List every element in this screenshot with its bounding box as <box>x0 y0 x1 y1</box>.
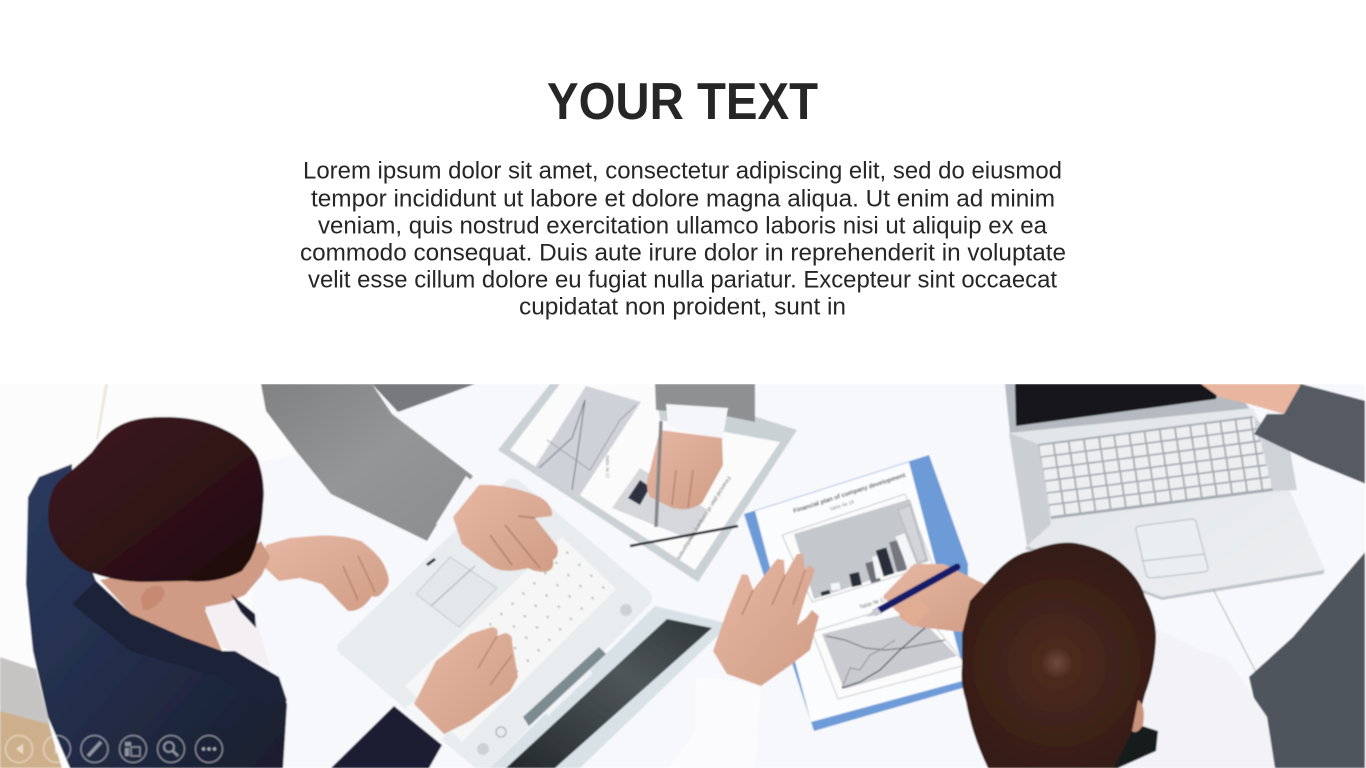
folder <box>744 455 968 731</box>
chart title text: Financial plan of company development <box>792 472 906 515</box>
body text block: veniam, quis nostrud exercitation ullamco laboris nisi ut aliquip ex ea <box>318 212 1048 240</box>
seated woman <box>26 417 518 768</box>
shoulder <box>372 384 475 412</box>
blue folder with charts: Table № 16 <box>829 499 855 513</box>
hinge <box>523 647 606 726</box>
touchpad <box>1136 519 1208 578</box>
document tray, top: Table № 17 <box>605 455 610 479</box>
body text block: Lorem ipsum dolor sit amet, consectetur adipiscing elit, sed do eiusmod <box>303 158 1062 184</box>
hand resting on folder <box>713 554 819 686</box>
white laptop, woman <box>337 478 730 768</box>
pen button <box>81 736 108 762</box>
title: YOUR TEXT <box>547 73 818 131</box>
document tray, top: Financial plan of company development <box>675 475 731 561</box>
line chart <box>812 600 966 699</box>
paper <box>755 462 966 722</box>
cuff <box>405 702 446 742</box>
seated man, bottom right <box>962 543 1275 768</box>
desk surface <box>0 384 1365 768</box>
cuff <box>436 476 479 534</box>
base <box>337 478 652 768</box>
next button <box>44 736 70 762</box>
pen <box>656 421 661 527</box>
touchpad <box>416 557 497 627</box>
lapel <box>72 581 287 704</box>
slideshow controls <box>6 736 222 762</box>
man's white cuff and sleeve, bottom centre <box>668 676 761 768</box>
man's arm, top centre, holding pen <box>647 384 755 527</box>
laptop base <box>1009 408 1325 597</box>
photo: business team at a desk <box>0 384 1366 768</box>
right sleeve <box>331 706 442 768</box>
white blouse <box>205 601 270 667</box>
left hand <box>261 536 389 611</box>
jacket <box>26 464 287 768</box>
bar chart <box>782 494 933 602</box>
zoom button <box>158 736 184 762</box>
neck and face <box>100 541 270 651</box>
keyboard <box>1038 416 1273 519</box>
document tray, top <box>498 384 797 582</box>
upper hand <box>1201 384 1301 414</box>
hand <box>453 485 558 572</box>
floor at left <box>0 384 300 768</box>
blue folder with charts: Table № 17 <box>859 597 887 611</box>
upper sleeve <box>1254 384 1366 484</box>
right hand <box>414 627 518 734</box>
body text block <box>300 158 1066 320</box>
silver laptop, top right <box>1005 384 1325 672</box>
body text block: commodo consequat. Duis aute irure dolor in reprehenderit in voluptate <box>300 240 1066 266</box>
speakers <box>620 604 632 616</box>
blue pen <box>866 567 957 617</box>
sleeve <box>261 384 473 541</box>
previous button <box>6 736 32 762</box>
blue folder with charts <box>744 455 968 731</box>
man in grey suit, arm <box>261 384 558 572</box>
ear <box>1132 700 1144 732</box>
keyboard <box>405 537 616 742</box>
lower sleeve <box>1249 551 1366 768</box>
far-right colleague <box>1201 384 1366 768</box>
laptop lid and screen <box>1005 384 1255 434</box>
body text block: velit esse cillum dolore eu fugiat nulla pariatur. Excepteur sint occaecat <box>308 266 1057 294</box>
finger over pen <box>898 598 930 627</box>
hair <box>962 543 1156 768</box>
hair <box>48 417 264 582</box>
ear <box>141 586 165 610</box>
writing hand <box>883 564 990 632</box>
body text block: tempor incididunt ut labore et dolore magna aliqua. Ut enim ad minim <box>311 186 1055 212</box>
more button <box>196 736 222 762</box>
lid <box>490 606 730 768</box>
slides button <box>120 736 146 762</box>
dark collar <box>1110 724 1158 768</box>
body text block: cupidatat non proident, sunt in <box>519 294 846 320</box>
white shirt <box>1100 629 1275 768</box>
